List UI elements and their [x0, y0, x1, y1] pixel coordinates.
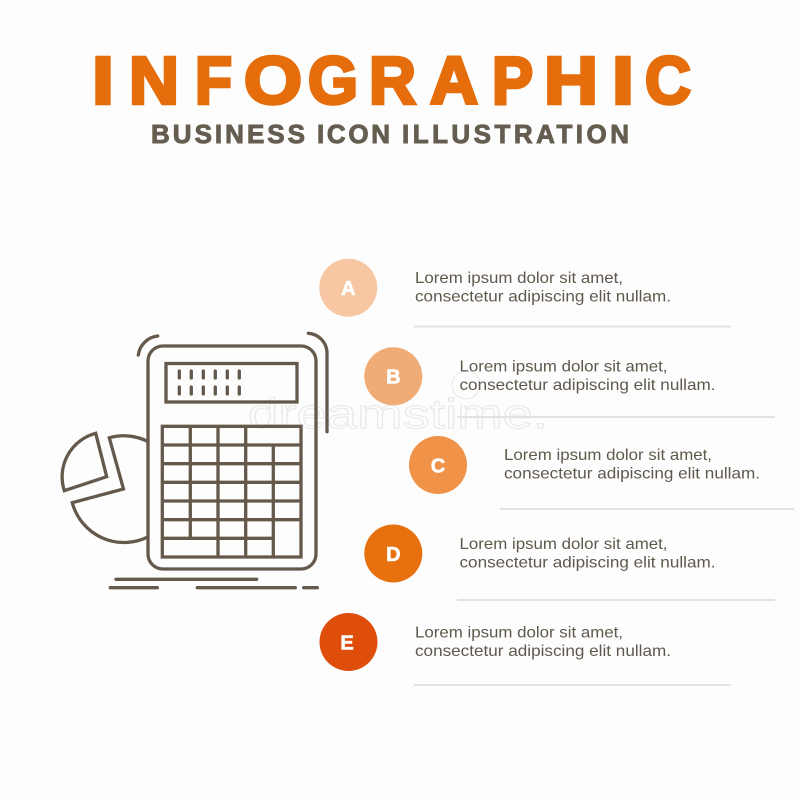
title: R	[369, 44, 416, 118]
title	[92, 44, 691, 118]
step D	[364, 524, 775, 601]
badge D: D	[386, 544, 401, 566]
subtitle	[151, 119, 629, 149]
badge E	[320, 613, 378, 671]
calculator keypad grid	[162, 426, 301, 557]
badge C	[409, 436, 467, 494]
badge D	[364, 524, 422, 582]
badge A: A	[341, 278, 356, 300]
badge B	[364, 347, 422, 405]
badge A	[319, 259, 377, 317]
ground lines	[110, 579, 317, 588]
badge E: E	[340, 632, 354, 654]
title: I	[92, 44, 114, 118]
title: P	[492, 44, 533, 118]
text D: Lorem ipsum dolor sit amet,	[460, 536, 668, 553]
title: O	[244, 44, 302, 118]
text D: consectetur adipiscing elit nullam.	[460, 554, 716, 571]
subtitle: BUSINESS	[151, 119, 305, 149]
calculator display	[166, 364, 297, 402]
watermark	[248, 371, 548, 437]
watermark: dreamstime.	[248, 390, 548, 437]
step C	[409, 436, 794, 510]
pie remainder	[72, 436, 148, 543]
title: I	[612, 44, 634, 118]
step B	[364, 347, 775, 418]
badge C: C	[431, 455, 445, 477]
text A: Lorem ipsum dolor sit amet,	[415, 270, 623, 287]
badge B: B	[386, 367, 401, 389]
text C: consectetur adipiscing elit nullam.	[504, 466, 760, 483]
title: A	[430, 44, 478, 118]
pie slice	[62, 433, 107, 491]
title: F	[195, 44, 232, 118]
title: G	[308, 44, 358, 118]
title: H	[544, 44, 598, 118]
sparkle arcs	[138, 333, 327, 432]
text E: consectetur adipiscing elit nullam.	[415, 643, 671, 660]
text B: Lorem ipsum dolor sit amet,	[460, 359, 668, 376]
subtitle: ILLUSTRATION	[402, 119, 629, 149]
icon: calculator with pie chart	[62, 333, 327, 588]
title: C	[645, 44, 691, 118]
text A: consectetur adipiscing elit nullam.	[415, 288, 671, 306]
text E: Lorem ipsum dolor sit amet,	[415, 624, 623, 641]
step E	[320, 613, 731, 686]
step A	[319, 259, 731, 328]
calculator body	[148, 346, 316, 569]
text C: Lorem ipsum dolor sit amet,	[504, 447, 712, 464]
subtitle: ICON	[317, 119, 390, 149]
title: N	[129, 44, 179, 118]
text B: consectetur adipiscing elit nullam.	[460, 377, 716, 394]
